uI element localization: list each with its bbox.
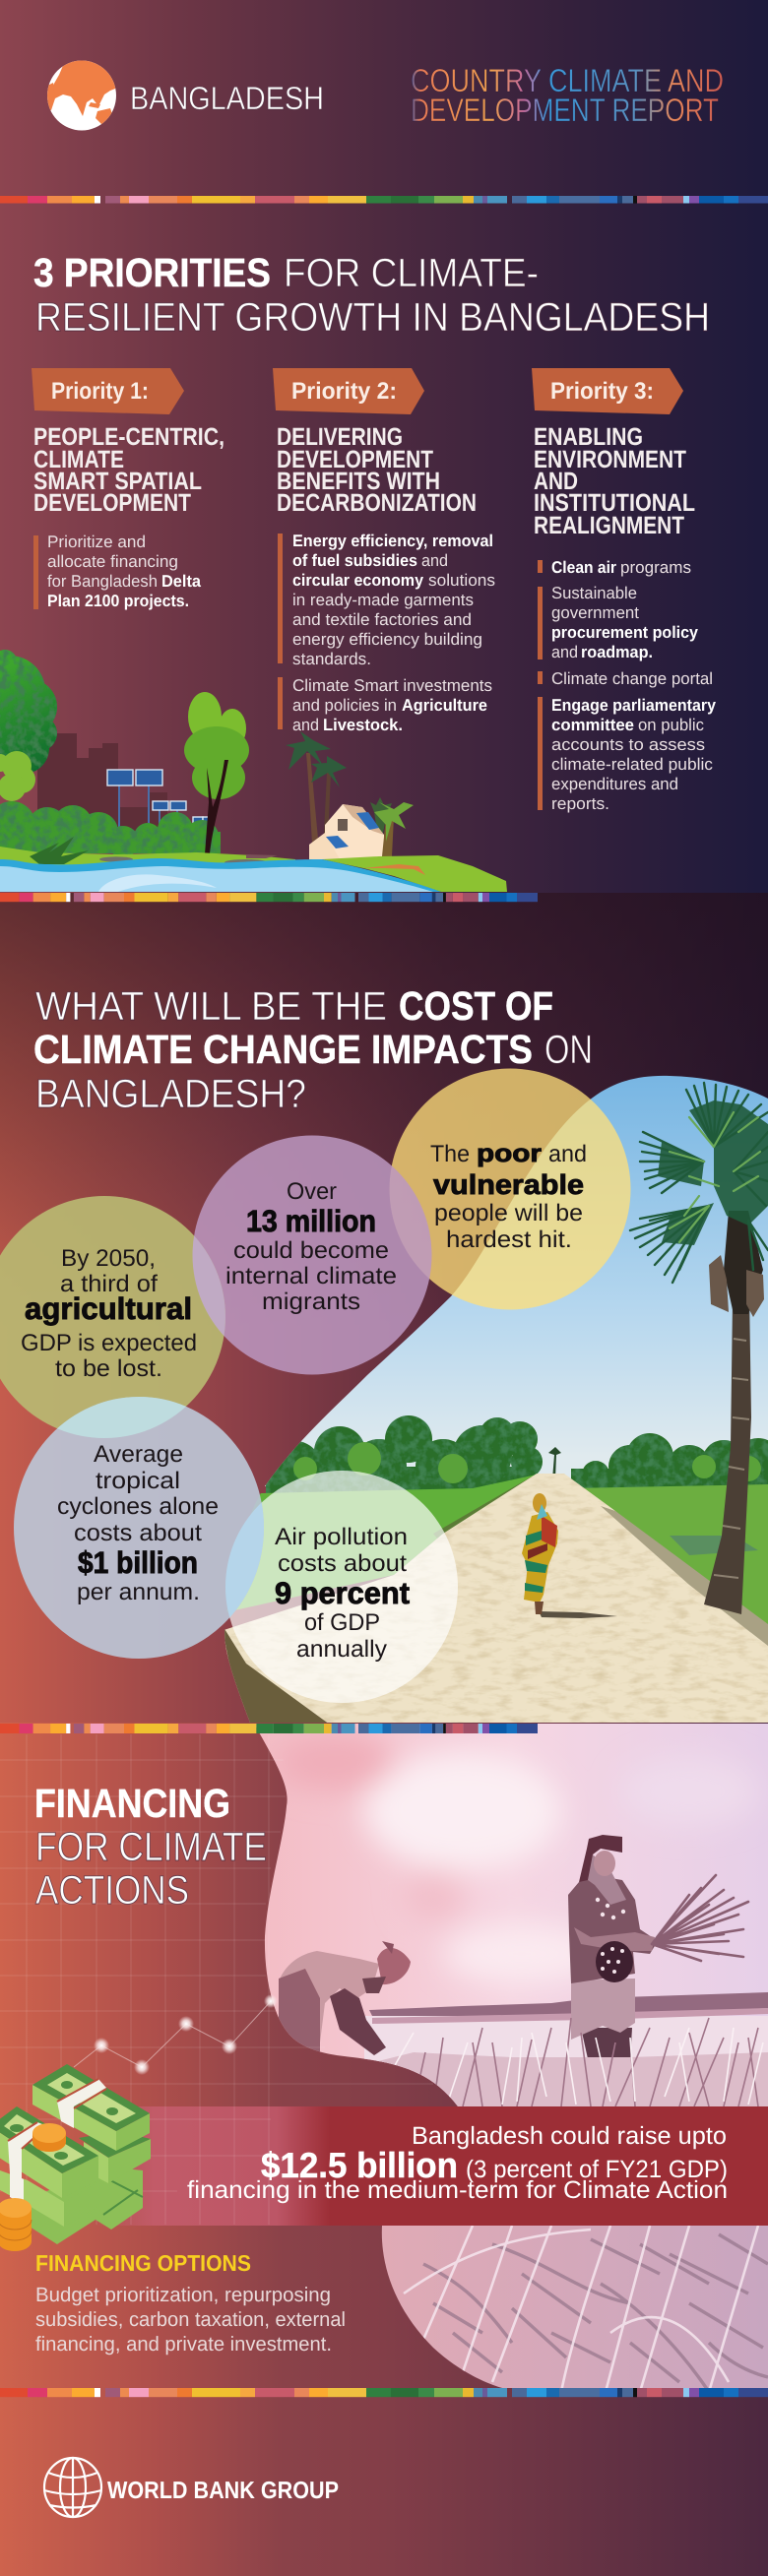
- color strip 3: [0, 1724, 538, 1733]
- ground and rocks: [0, 837, 507, 892]
- illustration: green landscape with river: [0, 650, 507, 892]
- text: priority 1 body: for Bangladesh: [47, 572, 158, 591]
- header: [45, 57, 724, 130]
- heading: cost of climate change: BANGLADESH?: [35, 1071, 306, 1116]
- text: parliamentary committee: climate-related public: [551, 755, 713, 774]
- banner: $12.5 billion: (3 percent of FY21 GDP): [466, 2156, 728, 2183]
- callout: agricultural GDP: a third of: [60, 1271, 158, 1297]
- callout: tropical cyclones: $1 billion: [78, 1545, 198, 1580]
- rice grass: [335, 2018, 768, 2111]
- text: priority 2 climate smart: Agriculture: [402, 696, 487, 715]
- callout: agricultural GDP: to be lost.: [55, 1355, 162, 1382]
- text: priority 1 body: Delta: [161, 572, 202, 591]
- callout: poor and vulnerable: people will be: [434, 1200, 583, 1226]
- callout: poor and vulnerable: and: [548, 1141, 587, 1167]
- heading: cost of climate change: WHAT WILL BE THE: [35, 983, 387, 1029]
- text: priority 2 energy: and textile factories and: [292, 610, 472, 629]
- callout: 13 million: migrants: [262, 1288, 360, 1315]
- road edge: [224, 1629, 327, 1723]
- text: procurement: Sustainable: [551, 584, 637, 602]
- text: priority 2 energy: energy efficiency building: [292, 630, 482, 649]
- photo: farmers harvesting (pink tint): [246, 1723, 768, 2111]
- text: financing options: subsidies, carbon taxation, external: [35, 2308, 346, 2331]
- city silhouette: [37, 733, 167, 847]
- bushes: [0, 801, 221, 857]
- cost callouts: [0, 1069, 630, 1703]
- text: procurement: roadmap.: [581, 643, 653, 661]
- solar panels: [107, 770, 213, 837]
- text: parliamentary committee: [538, 696, 717, 813]
- text: parliamentary committee: on public: [638, 716, 704, 734]
- chart: rising line with glowing points: [74, 1994, 278, 2075]
- text: clean air: Clean air: [551, 558, 616, 577]
- banner: $12.5 billion: Bangladesh could raise upto: [412, 2122, 727, 2150]
- palms: [286, 731, 392, 859]
- icon: globe outline: [44, 2458, 101, 2517]
- text: priority 2 climate smart: and: [292, 716, 319, 734]
- palm fronds: [630, 1083, 768, 1317]
- background: financing section: [0, 1723, 768, 2576]
- text: priority 2 energy: circular economy: [292, 571, 424, 590]
- background: priorities section: [0, 0, 768, 893]
- callout: 13 million: Over: [287, 1178, 337, 1205]
- tag: priority 1: Priority 1:: [51, 378, 149, 405]
- text: procurement: procurement policy: [551, 623, 699, 642]
- heading: priority 3: INSTITUTIONAL: [534, 489, 695, 517]
- text: priority 2 climate smart: and policies in: [292, 696, 397, 715]
- logo: World Bank Group: [44, 2458, 339, 2517]
- heading: priority 3: [534, 423, 695, 539]
- heading: cost of climate change: COST OF: [399, 983, 553, 1029]
- photo: woman walking on a rural road: [212, 1073, 768, 1732]
- text: financing options: [35, 2250, 346, 2356]
- sky: [217, 1073, 768, 1486]
- heading: priority 1: SMART SPATIAL: [33, 468, 202, 495]
- heading: priority 3: AND: [534, 468, 578, 495]
- text: priority 2 climate smart: Livestock.: [323, 716, 403, 734]
- callout: poor and vulnerable: vulnerable: [433, 1169, 584, 1200]
- text: clean air: programs: [620, 558, 691, 577]
- tag: priority 3: [532, 368, 683, 414]
- standing farmer: [568, 1835, 748, 2077]
- heading: priority 3: ENVIRONMENT: [534, 446, 686, 473]
- heading: financing: FOR CLIMATE: [35, 1824, 267, 1869]
- wordmark: WORLD BANK GROUP: [107, 2478, 339, 2504]
- callout: agricultural GDP: [0, 1136, 431, 1438]
- tag: priority 1: [32, 368, 184, 414]
- text: financing options: Budget prioritization, repurposing: [35, 2284, 331, 2306]
- text: parliamentary committee: expenditures and: [551, 775, 678, 793]
- callout: agricultural GDP: GDP is expected: [21, 1330, 197, 1356]
- text: priority 2 energy: standards.: [292, 650, 371, 668]
- text: priority 1 body: Prioritize and: [47, 533, 146, 551]
- heading: priority 1: DEVELOPMENT: [33, 489, 191, 517]
- tag: priority 2: Priority 2:: [291, 378, 397, 405]
- text: procurement: [538, 584, 699, 661]
- woman: [522, 1493, 617, 1618]
- banner: $12.5 billion: financing in the medium-term for Climate Action: [187, 2176, 728, 2204]
- callout: air pollution: 9 percent: [275, 1576, 410, 1610]
- tree line: [266, 1415, 768, 1496]
- text: parliamentary committee: committee: [551, 716, 634, 734]
- grid lines: [0, 1734, 433, 2225]
- palm tree trunk: [704, 1308, 751, 1614]
- callout: tropical cyclones: Average: [94, 1441, 183, 1468]
- house: [309, 804, 384, 859]
- text: priority 2 energy: of fuel subsidies: [292, 551, 417, 570]
- panel: priority 1: [32, 368, 224, 610]
- callout: poor and vulnerable: [390, 1069, 630, 1309]
- text: procurement: government: [551, 603, 639, 622]
- heading: cost of climate change: CLIMATE CHANGE IMPACTS: [33, 1027, 533, 1072]
- heading: 3 priorities: RESILIENT GROWTH IN BANGLADESH: [35, 294, 710, 340]
- callout: poor and vulnerable: The: [430, 1141, 470, 1167]
- tag: priority 2: [273, 368, 424, 414]
- callout: air pollution: of GDP: [304, 1609, 380, 1636]
- text: parliamentary committee: Engage parliamentary: [551, 696, 717, 715]
- tag: priority 3: Priority 3:: [550, 378, 654, 405]
- banner: $12.5 billion: $12.5 billion: [261, 2145, 458, 2185]
- text: priority 2 energy: and: [421, 551, 448, 570]
- callout: tropical cyclones: cyclones alone: [57, 1493, 219, 1520]
- far shore: [369, 1992, 768, 2020]
- callout: agricultural GDP: By 2050,: [61, 1245, 156, 1272]
- text: procurement: and: [551, 643, 578, 661]
- text: priority 2 energy: Energy efficiency, removal: [292, 532, 493, 550]
- callout: 13 million: internal climate: [225, 1263, 397, 1289]
- callout: air pollution: costs about: [278, 1550, 407, 1577]
- text: priority 1 body: allocate financing: [47, 552, 178, 571]
- green fields: [217, 1475, 537, 1614]
- text: financing options: financing, and private investment.: [35, 2333, 332, 2356]
- panel: priority 2: [273, 368, 495, 734]
- heading: priority 1: [33, 423, 224, 517]
- heading: cost of climate change: [33, 983, 593, 1116]
- callout: air pollution: annually: [296, 1636, 387, 1663]
- callout: tropical cyclones: per annum.: [77, 1579, 200, 1605]
- callout: tropical cyclones: costs about: [74, 1520, 202, 1546]
- country name: BANGLADESH: [130, 80, 324, 116]
- color strip 1: [0, 196, 768, 203]
- text: priority 2 energy: solutions: [428, 571, 495, 590]
- small light tree: [0, 751, 35, 801]
- heading: priority 2: DEVELOPMENT: [277, 446, 433, 473]
- heading: priority 3: ENABLING: [534, 423, 643, 451]
- panel: priority 3: [532, 368, 717, 813]
- text: priority 1 body: Plan 2100 projects.: [47, 592, 189, 610]
- callout: 13 million: 13 million: [246, 1204, 376, 1238]
- heading: financing: ACTIONS: [35, 1867, 189, 1913]
- callout: tropical cyclones: tropical: [96, 1468, 180, 1494]
- report title: [411, 62, 724, 128]
- text: priority 2 energy: in ready-made garments: [292, 591, 474, 609]
- heading: cost of climate change: ON: [544, 1027, 593, 1072]
- heading: 3 priorities: FOR CLIMATE-: [284, 250, 539, 295]
- photo: rice stalks close-up: [374, 2226, 768, 2393]
- icon: orange globe: [47, 61, 116, 130]
- heading: priority 2: DECARBONIZATION: [277, 489, 477, 517]
- river: [0, 858, 441, 892]
- road: [212, 1474, 768, 1732]
- banana plant: [374, 802, 414, 856]
- text: parliamentary committee: reports.: [551, 794, 609, 813]
- text: priority 2 climate smart: Climate Smart investments: [292, 676, 492, 695]
- text: priority 1 body: [33, 533, 202, 610]
- heading: financing: FINANCING: [34, 1781, 230, 1826]
- callout: 13 million: could become: [233, 1237, 389, 1264]
- text: priority 2 energy: [278, 532, 495, 668]
- heading: 3 priorities: 3 PRIORITIES: [33, 250, 271, 295]
- bending farmer: [279, 1941, 411, 2057]
- heading: financing: [34, 1781, 267, 1913]
- text: priority 2 climate smart: [278, 676, 492, 734]
- icon: stacks of money and coins: [0, 2064, 151, 2251]
- big tree: [0, 650, 57, 774]
- callout: tropical cyclones: [14, 1397, 264, 1659]
- callout: air pollution: Air pollution: [275, 1524, 408, 1550]
- background: cost section: [0, 893, 768, 1724]
- callout: agricultural GDP: agricultural: [25, 1291, 192, 1326]
- text: financing options: FINANCING OPTIONS: [35, 2250, 251, 2276]
- text: parliamentary committee: accounts to assess: [551, 735, 705, 754]
- banner: $12.5 billion: [0, 2106, 768, 2226]
- heading: priority 1: CLIMATE: [33, 446, 124, 473]
- callout: poor and vulnerable: hardest hit.: [446, 1226, 572, 1253]
- heading: priority 2: DELIVERING: [277, 423, 403, 451]
- text: portal: Climate change portal: [551, 669, 713, 688]
- clouds: [276, 1732, 758, 1983]
- water: [364, 2016, 768, 2075]
- callout: 13 million: [193, 1136, 431, 1374]
- callout: poor and vulnerable: poor: [477, 1140, 542, 1167]
- color strip 4: [0, 2388, 768, 2397]
- tinted sky: [246, 1723, 768, 2111]
- right tree: [184, 692, 249, 854]
- color strip 2: [0, 893, 538, 902]
- heading: priority 3: REALIGNMENT: [534, 512, 684, 539]
- heading: 3 priorities: [33, 250, 710, 340]
- heading: priority 1: PEOPLE-CENTRIC,: [33, 423, 224, 451]
- heading: priority 2: BENEFITS WITH: [277, 468, 440, 495]
- callout: air pollution: [225, 1471, 458, 1703]
- text: clean air: [538, 558, 691, 577]
- heading: priority 2: [277, 423, 477, 517]
